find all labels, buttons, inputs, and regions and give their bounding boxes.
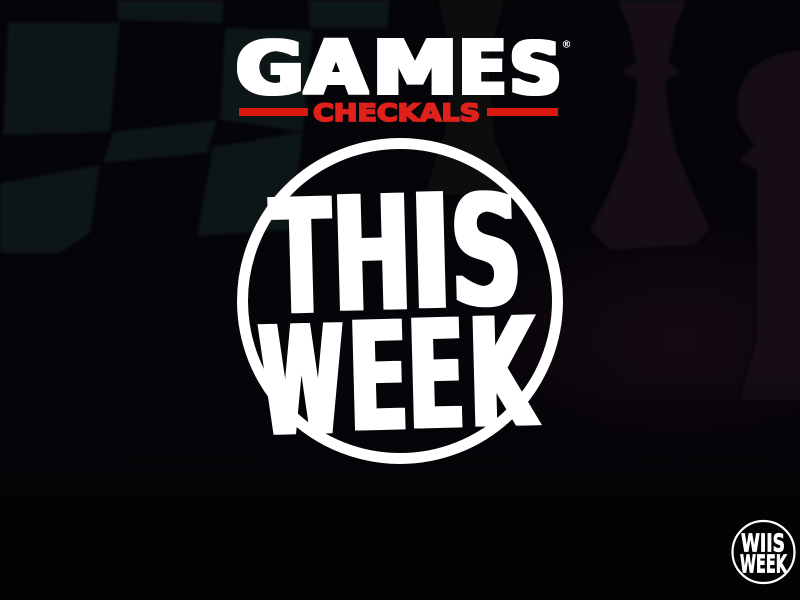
logo wordmark: GAMES: E — [459, 25, 506, 111]
background: checkered flag — [0, 0, 390, 253]
logo: GAMES CHECKALS — [236, 25, 572, 127]
background: chess pawn — [737, 50, 800, 400]
logo wordmark: GAMES: S — [510, 28, 561, 110]
logo wordmark: GAMES: A — [305, 25, 367, 112]
logo wordmark: GAMES: G — [236, 28, 304, 111]
headline: WEEK: E — [406, 287, 466, 465]
red bar right — [487, 108, 558, 116]
background: chess queen — [590, 0, 710, 250]
headline: WEEK — [257, 286, 541, 472]
headline: THIS: H — [331, 160, 414, 349]
sub-brand: CHECKALS: CHECKALS — [313, 99, 480, 127]
red bar left — [239, 108, 308, 116]
corner badge: WIIS WEEK — [732, 521, 794, 583]
headline: THIS — [269, 159, 524, 352]
logo wordmark: GAMES — [236, 25, 561, 112]
logo wordmark: GAMES: M — [372, 25, 458, 111]
headline: WEEK: K — [467, 286, 541, 464]
headline: WEEK: W — [257, 293, 346, 472]
headline: THIS: S — [448, 161, 524, 343]
emblem ring — [242, 144, 558, 458]
headline: THIS: I — [408, 159, 454, 347]
registered mark: ® — [562, 40, 572, 50]
background: lit chess board — [470, 210, 800, 470]
headline: WEEK: E — [346, 289, 410, 468]
headline: THIS: T — [269, 164, 333, 352]
badge ring — [732, 521, 794, 583]
background: distant chess piece — [425, 0, 520, 195]
emblem: THIS WEEK circle — [242, 144, 558, 472]
